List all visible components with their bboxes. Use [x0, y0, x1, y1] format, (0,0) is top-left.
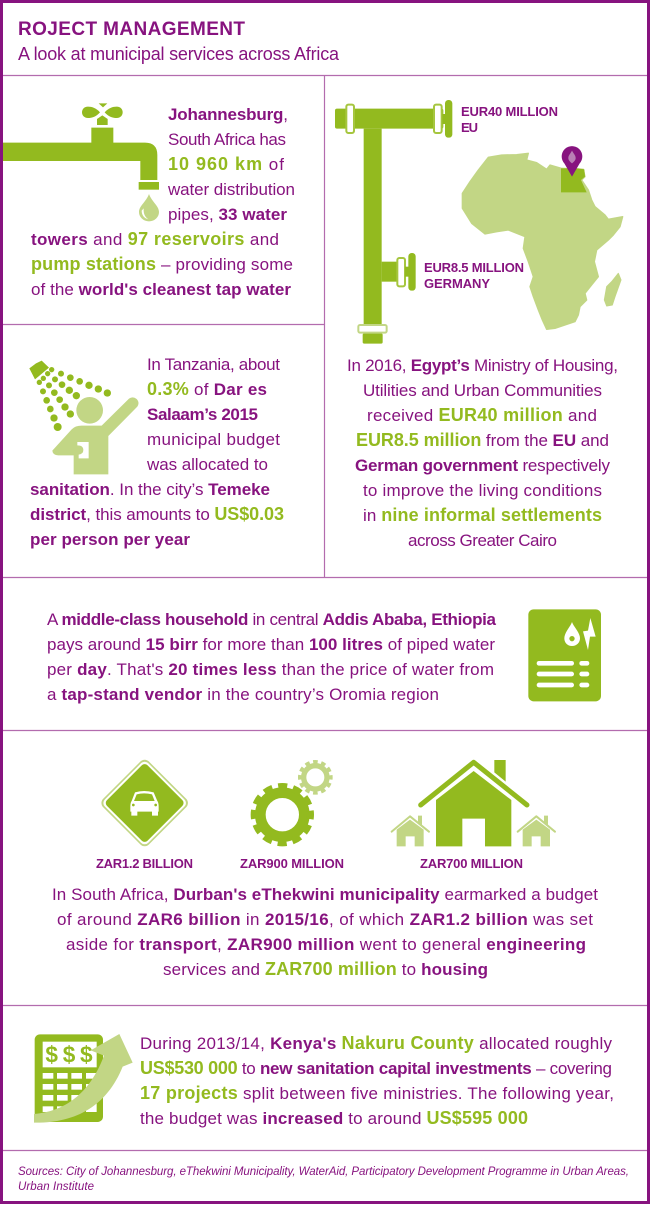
text: Tanzania facts: Salaam’s 2015 [147, 405, 258, 424]
sources: Sources: City of Johannesburg, eThekwini Municipality, WaterAid, Participatory Development Programme in Urban Areas, [18, 1166, 629, 1178]
text: Egypt facts: Utilities and Urban Communities [363, 381, 602, 400]
sources [18, 1166, 629, 1193]
text: Durban facts: aside for transport, ZAR900 million went to general engineering [66, 935, 586, 954]
text: Johannesburg facts: water distribution [167, 180, 295, 199]
icon: water tap [3, 103, 159, 221]
icon: houses [392, 760, 555, 846]
text: Tanzania facts: sanitation. In the city’s Temeke [30, 480, 270, 499]
text: Egypt facts: German government respectively [355, 456, 610, 475]
text: Johannesburg facts [31, 105, 295, 299]
text: Kenya facts: the budget was increased to around US$595 000 [140, 1108, 528, 1128]
text: Tanzania facts: per person per year [30, 530, 190, 549]
text: Tanzania facts: district, this amounts to US$0.03 [30, 504, 284, 524]
text: Ethiopia facts: per day. That's 20 times less than the price of water from [47, 660, 494, 679]
panel: Addis Ababa [47, 609, 601, 704]
label: Germany funding [424, 260, 524, 291]
text: Johannesburg facts: South Africa has [168, 130, 286, 149]
text: Tanzania facts: In Tanzania, about [147, 355, 280, 374]
text: Ethiopia facts: A middle-class household in central Addis Ababa, Ethiopia [47, 610, 497, 629]
text: Johannesburg facts: towers and 97 reservoirs and [31, 229, 279, 249]
label: Germany funding: GERMANY [424, 276, 490, 291]
text: Durban facts [52, 885, 598, 979]
text: Egypt facts: In 2016, Egypt’s Ministry of Housing, [347, 356, 618, 375]
heading: ROJECT MANAGEMENT [18, 19, 245, 40]
text: Ethiopia facts: a tap-stand vendor in the country’s Oromia region [47, 685, 439, 704]
icon: calculator with rising arrow: $$$ [45, 1042, 93, 1068]
label: EU funding: EUR40 MILLION [461, 104, 558, 119]
text: Durban facts: In South Africa, Durban's eThekwini municipality earmarked a budget [52, 885, 598, 904]
text: Kenya facts [140, 1033, 614, 1128]
panel: Tanzania [29, 355, 284, 549]
icon: person showering [29, 361, 139, 474]
label: housing budget: ZAR700 MILLION [420, 856, 523, 871]
panel: Egypt [335, 100, 623, 550]
subtitle: A look at municipal services across Africa [18, 44, 340, 64]
text: Tanzania facts: 0.3% of Dar es [147, 379, 267, 399]
text: Durban facts: of around ZAR6 billion in 2015/16, of which ZAR1.2 billion was set [57, 910, 593, 929]
text: Kenya facts: During 2013/14, Kenya's Nakuru County allocated roughly [140, 1033, 612, 1053]
label: transport budget: ZAR1.2 BILLION [96, 856, 193, 871]
text: Johannesburg facts: pipes, 33 water [168, 205, 287, 224]
text: Ethiopia facts: pays around 15 birr for more than 100 litres of piped water [47, 635, 495, 654]
text: Kenya facts: 17 projects split between five ministries. The following year, [140, 1083, 614, 1103]
icon: gears [254, 762, 331, 843]
map: Africa with Egypt highlighted [462, 146, 623, 329]
label: EU funding [461, 104, 558, 135]
icon: funding pipes [335, 100, 452, 344]
text: Johannesburg facts: Johannesburg, [168, 105, 288, 124]
text: Egypt facts: received EUR40 million and [367, 405, 597, 425]
text: Egypt facts: to improve the living conditions [363, 481, 602, 500]
text: Durban facts: services and ZAR700 million to housing [163, 959, 488, 979]
icon: utility bill [528, 609, 601, 701]
text: Egypt facts: across Greater Cairo [408, 531, 557, 550]
text: Johannesburg facts: 10 960 km of [168, 154, 284, 174]
text: Johannesburg facts: of the world's cleanest tap water [31, 280, 291, 299]
panel: Nakuru [34, 1033, 614, 1128]
text: Tanzania facts: was allocated to [146, 455, 268, 474]
label: engineering budget: ZAR900 MILLION [240, 856, 344, 871]
icon: calculator with rising arrow [34, 1034, 133, 1123]
label: Germany funding: EUR8.5 MILLION [424, 260, 524, 275]
text: Tanzania facts: municipal budget [147, 430, 280, 449]
panel: Johannesburg [3, 103, 295, 299]
text: Tanzania facts [30, 355, 284, 549]
text: Kenya facts: US$530 000 to new sanitation capital investments – covering [140, 1058, 612, 1078]
text: Egypt facts [347, 356, 618, 550]
sources: Urban Institute [18, 1181, 94, 1193]
panel: Durban [52, 757, 598, 979]
label: EU funding: EU [461, 120, 478, 135]
icon: road sign with car [99, 757, 190, 849]
title [18, 19, 340, 64]
text: Johannesburg facts: pump stations – providing some [31, 254, 293, 274]
text: Egypt facts: EUR8.5 million from the EU and [356, 430, 609, 450]
text: Egypt facts: in nine informal settlements [363, 505, 602, 525]
text: Ethiopia facts [47, 610, 497, 704]
